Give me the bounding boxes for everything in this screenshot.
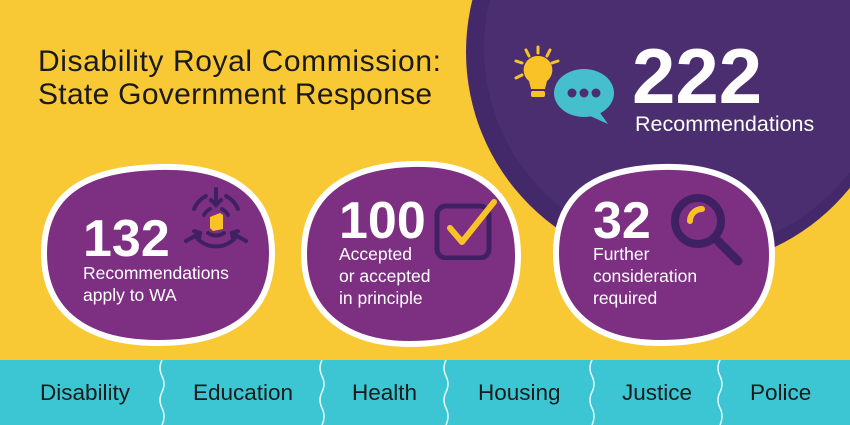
bottom strip: sectors — [0, 360, 850, 425]
panel: 32 further consideration: 32 — [593, 192, 651, 250]
bottom strip: sectors: Education — [193, 380, 293, 405]
panel: 32 further consideration — [553, 164, 775, 346]
panel: 132 applies to WA: apply to WA — [83, 285, 177, 305]
icon: checkbox — [434, 199, 497, 260]
panel: 100 accepted: Accepted — [339, 244, 412, 264]
panel: 32 further consideration: consideration — [593, 266, 697, 286]
bottom strip: sectors: Disability — [40, 380, 130, 405]
icon: lightbulb and speech bubble — [514, 46, 614, 124]
bottom strip: sectors: Health — [352, 380, 417, 405]
icon: magnifier — [671, 194, 742, 266]
panel: 100 accepted: in principle — [339, 288, 423, 308]
bottom strip: sectors: Police — [750, 380, 811, 405]
bottom strip: sectors: Housing — [478, 380, 561, 405]
panel: 32 further consideration: required — [593, 288, 657, 308]
stat: 222 recommendations: 222 — [632, 32, 762, 120]
title: State Government Response — [38, 78, 432, 111]
panel: 100 accepted — [301, 160, 521, 347]
panel: 132 applies to WA — [41, 164, 275, 346]
stat: 222 recommendations — [632, 32, 814, 136]
title: Disability Royal Commission: — [38, 45, 442, 78]
bottom strip: sectors: Justice — [622, 380, 692, 405]
panel: 100 accepted: 100 — [339, 192, 426, 250]
stat: 222 recommendations: Recommendations — [635, 112, 814, 136]
panel: 132 applies to WA: Recommendations — [83, 263, 229, 283]
panel: 132 applies to WA: 132 — [83, 210, 170, 268]
panel: 32 further consideration: Further — [593, 244, 649, 264]
icon: WA map cycle — [184, 187, 248, 248]
panel: 100 accepted: or accepted — [339, 266, 430, 286]
title — [38, 45, 442, 111]
